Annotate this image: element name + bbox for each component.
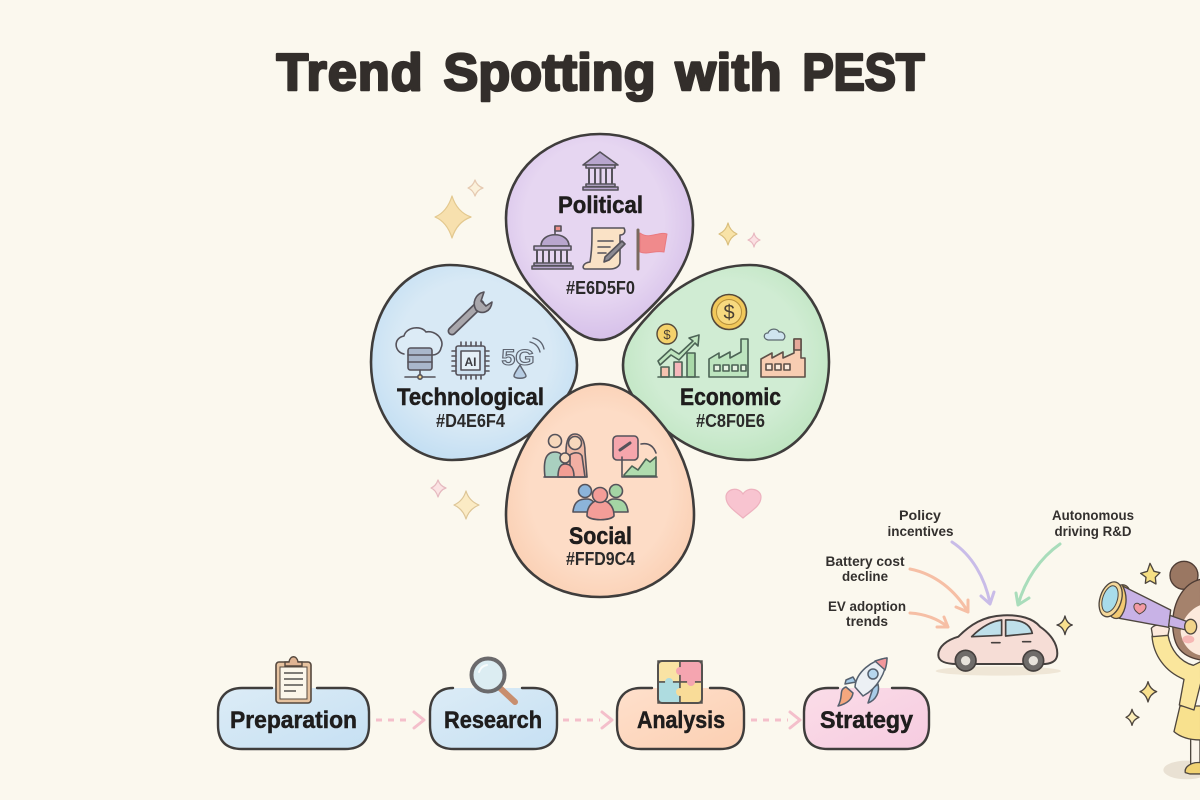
icon: AI chip bbox=[452, 342, 489, 379]
economic hex code: #C8F0E6 bbox=[696, 411, 765, 431]
icon: three people bbox=[573, 484, 628, 520]
dollar sign: $ bbox=[723, 302, 735, 324]
process: analysis bbox=[617, 661, 744, 749]
icon: 5G signal bbox=[502, 338, 544, 378]
icon: large coin bbox=[712, 294, 746, 330]
legs and shoe bbox=[1191, 735, 1200, 765]
icon: family bbox=[544, 434, 587, 477]
icon: rocket bbox=[838, 658, 887, 706]
illustration: girl with telescope bbox=[1095, 561, 1200, 779]
icon: temple bbox=[583, 152, 618, 190]
hair bbox=[1173, 579, 1200, 660]
hand bbox=[1151, 625, 1169, 637]
icon: scroll and pen bbox=[583, 228, 625, 269]
social hex code: #FFD9C4 bbox=[566, 549, 635, 569]
face bbox=[1181, 605, 1200, 655]
icon: small cloud bbox=[764, 329, 785, 340]
decorative sparkles around the diagram bbox=[431, 180, 760, 519]
analysis label: Analysis bbox=[637, 707, 725, 734]
title: Trend bbox=[276, 44, 422, 102]
trend notes with arrows: trends bbox=[846, 614, 888, 629]
note: battery cost: Battery cost bbox=[826, 554, 905, 569]
process: research bbox=[430, 658, 557, 749]
economic blob bbox=[623, 265, 829, 460]
icon: small coin bbox=[657, 324, 677, 344]
political hex code: #E6D5F0 bbox=[566, 278, 635, 298]
preparation label: Preparation bbox=[230, 707, 357, 734]
research box outline bbox=[430, 688, 557, 749]
political label: Political bbox=[558, 192, 643, 219]
analysis box outline bbox=[617, 688, 744, 749]
research label: Research bbox=[444, 707, 542, 734]
icon: wrench bbox=[452, 292, 492, 331]
panel: political bbox=[506, 134, 693, 340]
title: PEST bbox=[802, 44, 925, 102]
technological hex code: #D4E6F4 bbox=[436, 411, 505, 431]
hair bun bbox=[1170, 561, 1198, 589]
political blob bbox=[506, 134, 693, 340]
ground shadow bbox=[1163, 761, 1200, 779]
research box fill bbox=[430, 688, 557, 749]
arrow: EV bbox=[910, 613, 948, 627]
arrow: policy bbox=[952, 542, 994, 604]
telescope body bbox=[1119, 586, 1171, 627]
note: autonomous driving: Autonomous bbox=[1052, 508, 1134, 523]
arm and jacket bbox=[1152, 635, 1200, 710]
icon: cloud server bbox=[396, 328, 442, 379]
note: EV adoption: EV adoption bbox=[828, 599, 906, 614]
analysis box fill bbox=[617, 688, 744, 749]
note: policy incentives: Policy bbox=[899, 508, 942, 523]
icon: magnifier bbox=[472, 658, 515, 702]
process: preparation bbox=[218, 657, 369, 749]
trend notes with arrows: driving R&D bbox=[1054, 524, 1132, 539]
technological blob bbox=[371, 265, 577, 460]
title: with bbox=[674, 44, 782, 102]
icon: clipboard bbox=[276, 657, 311, 703]
icon: puzzle bbox=[658, 661, 702, 703]
telescope band bbox=[1104, 582, 1135, 621]
panel: social bbox=[506, 384, 694, 597]
icon: heart bbox=[726, 489, 761, 518]
social label: Social bbox=[569, 523, 632, 550]
title bbox=[276, 44, 925, 102]
arrow: research to analysis bbox=[563, 712, 612, 728]
telescope heart bbox=[1134, 603, 1146, 614]
panel: technological bbox=[371, 265, 577, 460]
sparkle bbox=[1140, 682, 1157, 702]
strategy label: Strategy bbox=[820, 707, 914, 734]
eyepiece bbox=[1185, 619, 1197, 634]
icon: 5G signal: 5G bbox=[502, 345, 534, 370]
icon: red flag bbox=[638, 230, 667, 269]
icon: peach factory bbox=[761, 339, 805, 377]
economic label: Economic bbox=[680, 384, 781, 411]
process: strategy bbox=[804, 658, 929, 749]
preparation box fill bbox=[218, 688, 369, 749]
arrow: autonomous bbox=[1016, 544, 1060, 605]
trend notes with arrows: decline bbox=[842, 569, 888, 584]
trend notes with arrows: incentives bbox=[888, 524, 954, 539]
arrow: analysis to strategy bbox=[751, 712, 800, 728]
AI chip label: AI bbox=[464, 355, 476, 369]
telescope lens bbox=[1095, 579, 1126, 620]
title: Spotting bbox=[444, 44, 656, 102]
icon: green factory bbox=[709, 339, 748, 377]
icon: link bubble and trend bbox=[613, 436, 657, 477]
icon: growth chart bbox=[658, 335, 699, 377]
social blob bbox=[506, 384, 694, 597]
strategy box outline bbox=[804, 688, 929, 749]
icon: capitol bbox=[532, 226, 573, 269]
arrow: preparation to research bbox=[376, 712, 424, 728]
technological label: Technological bbox=[397, 384, 544, 411]
star bbox=[1141, 563, 1160, 584]
panel: economic bbox=[623, 265, 829, 460]
strategy box fill bbox=[804, 688, 929, 749]
icon: car bbox=[936, 615, 1072, 676]
arrow: battery bbox=[910, 569, 968, 612]
skirt bbox=[1174, 706, 1200, 740]
small sparkle bbox=[1126, 709, 1139, 725]
preparation box outline bbox=[218, 688, 369, 749]
trend notes with arrows bbox=[826, 508, 1134, 629]
small dollar sign: $ bbox=[663, 327, 671, 342]
